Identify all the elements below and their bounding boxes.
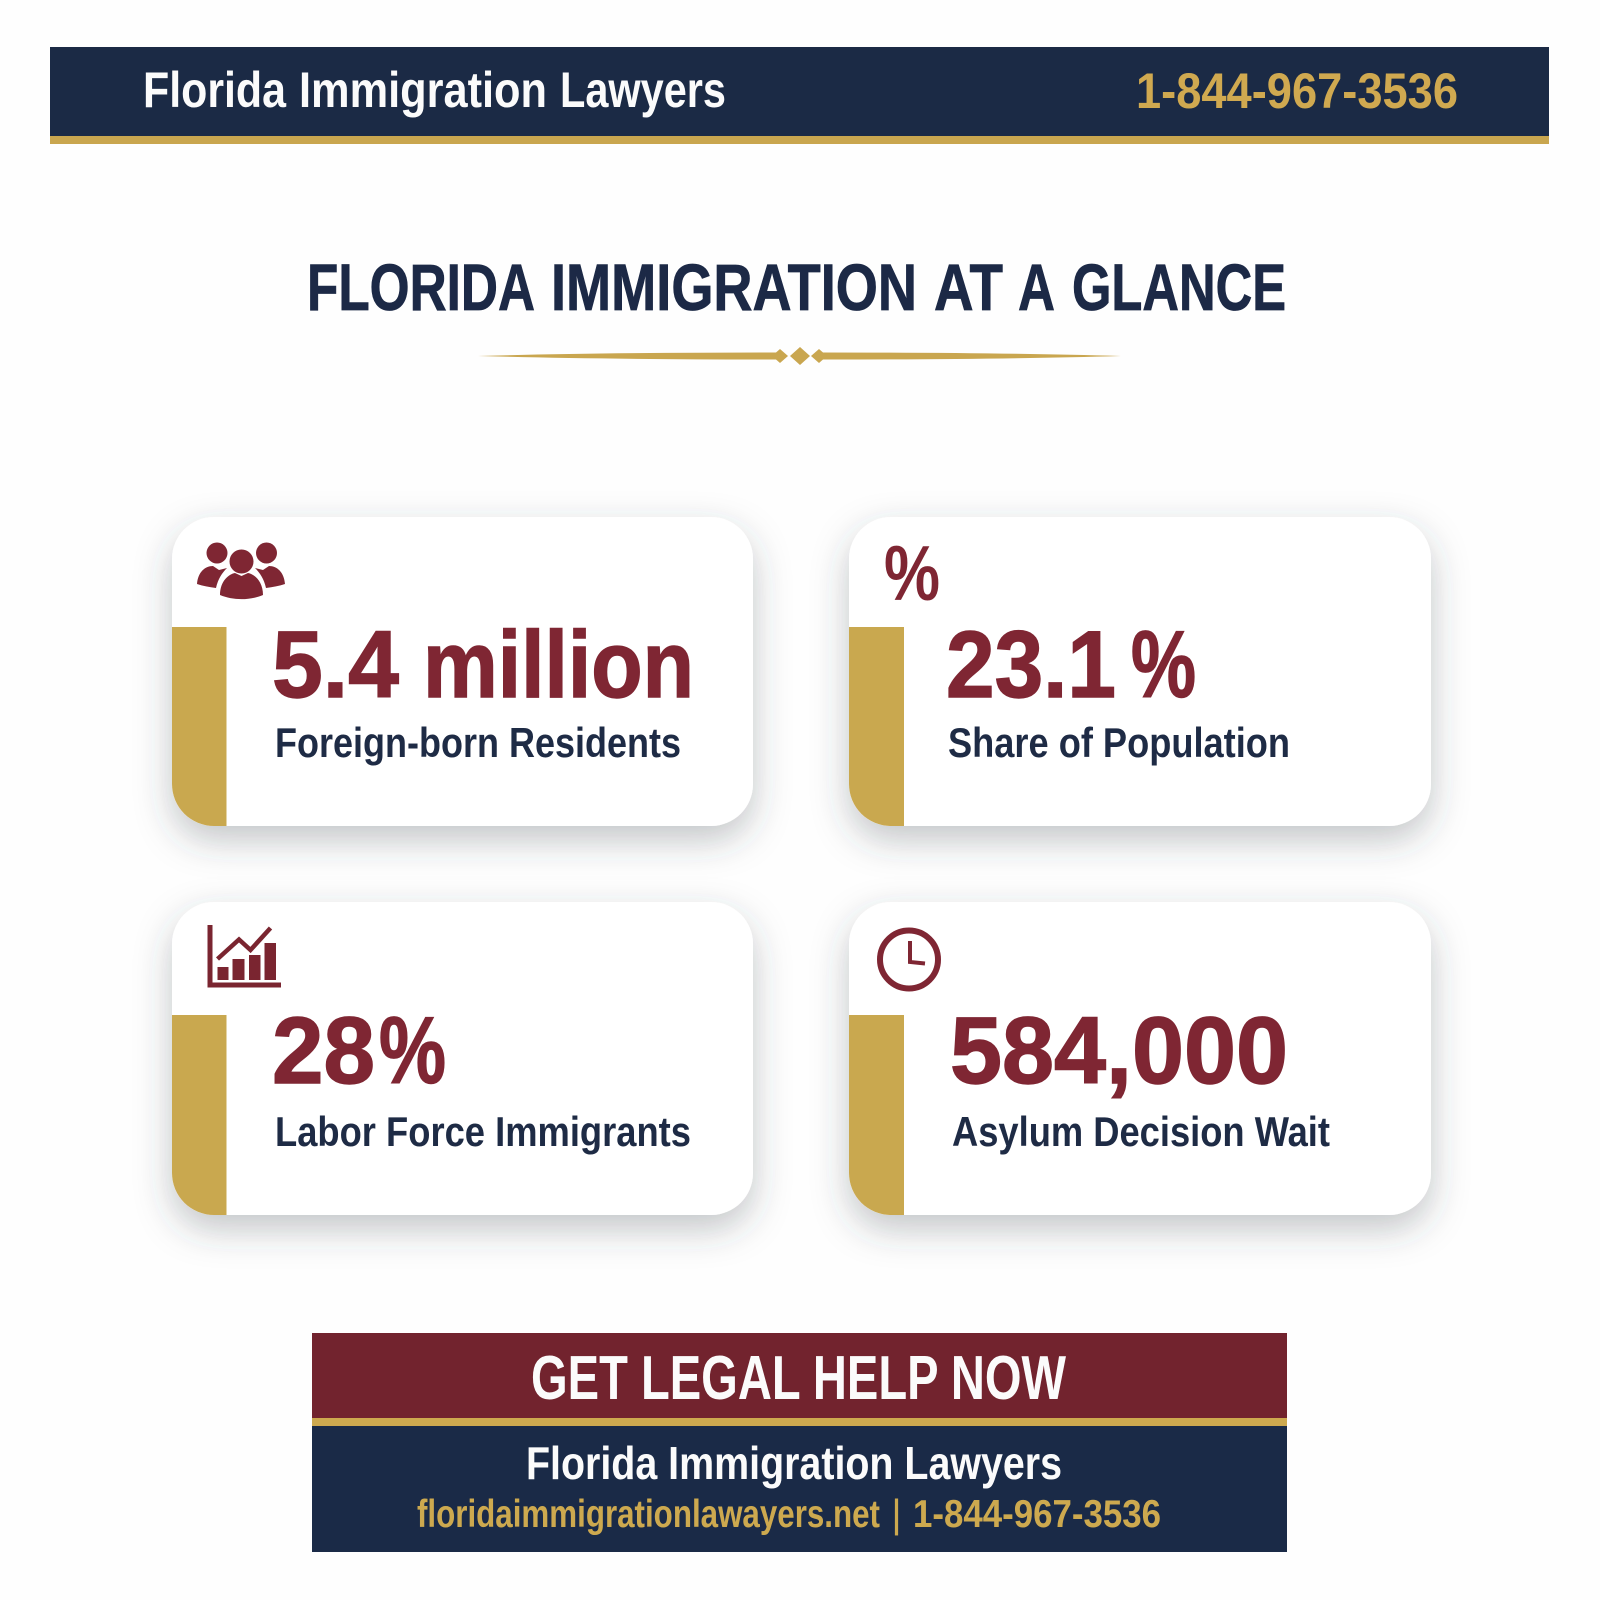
stat label: Foreign-born Residents <box>275 719 681 766</box>
header banner <box>50 47 1549 144</box>
stat value: % <box>1131 612 1196 718</box>
header firm name: Lawyers <box>560 62 726 118</box>
panel: share of population <box>849 517 1431 826</box>
website and phone: | <box>893 1493 900 1536</box>
title: GLANCE <box>1072 250 1286 324</box>
icon: growth chart <box>210 925 281 985</box>
title: AT <box>934 250 1003 324</box>
icon: people <box>197 542 285 599</box>
icon: clock <box>880 930 938 988</box>
stat value <box>272 998 446 1104</box>
call to action banner <box>312 1333 1287 1552</box>
stat label: Labor Force Immigrants <box>275 1108 691 1155</box>
stat label: Share of Population <box>948 719 1290 766</box>
website and phone: 1-844-967-3536 <box>913 1493 1161 1536</box>
icon: percent: % <box>884 529 940 617</box>
panel: foreign-born residents <box>172 517 753 826</box>
stat label: Asylum Decision Wait <box>952 1108 1330 1155</box>
panel: asylum decision wait <box>849 902 1431 1215</box>
header firm name <box>143 62 726 118</box>
title: A <box>1018 250 1055 324</box>
stat value: % <box>379 998 446 1104</box>
website and phone: floridaimmigrationlawayers.net <box>417 1493 880 1536</box>
stat value: 28 <box>272 998 375 1104</box>
call to action heading: GET LEGAL HELP NOW <box>531 1344 1066 1413</box>
title divider ornament <box>478 347 1121 365</box>
stat value: 5.4 <box>272 612 399 718</box>
header phone number: 1-844-967-3536 <box>1136 63 1458 119</box>
stat value: 23.1 <box>946 612 1116 718</box>
stat value: million <box>423 612 694 718</box>
firm name: Florida Immigration Lawyers <box>526 1437 1062 1489</box>
title <box>307 250 1286 324</box>
panel: labor force immigrants <box>172 902 753 1215</box>
stat value: 584,000 <box>950 998 1288 1104</box>
header firm name: Immigration <box>299 62 547 118</box>
title: FLORIDA <box>307 250 535 324</box>
header firm name: Florida <box>143 62 287 118</box>
title: IMMIGRATION <box>551 250 917 324</box>
stat value <box>272 612 694 718</box>
